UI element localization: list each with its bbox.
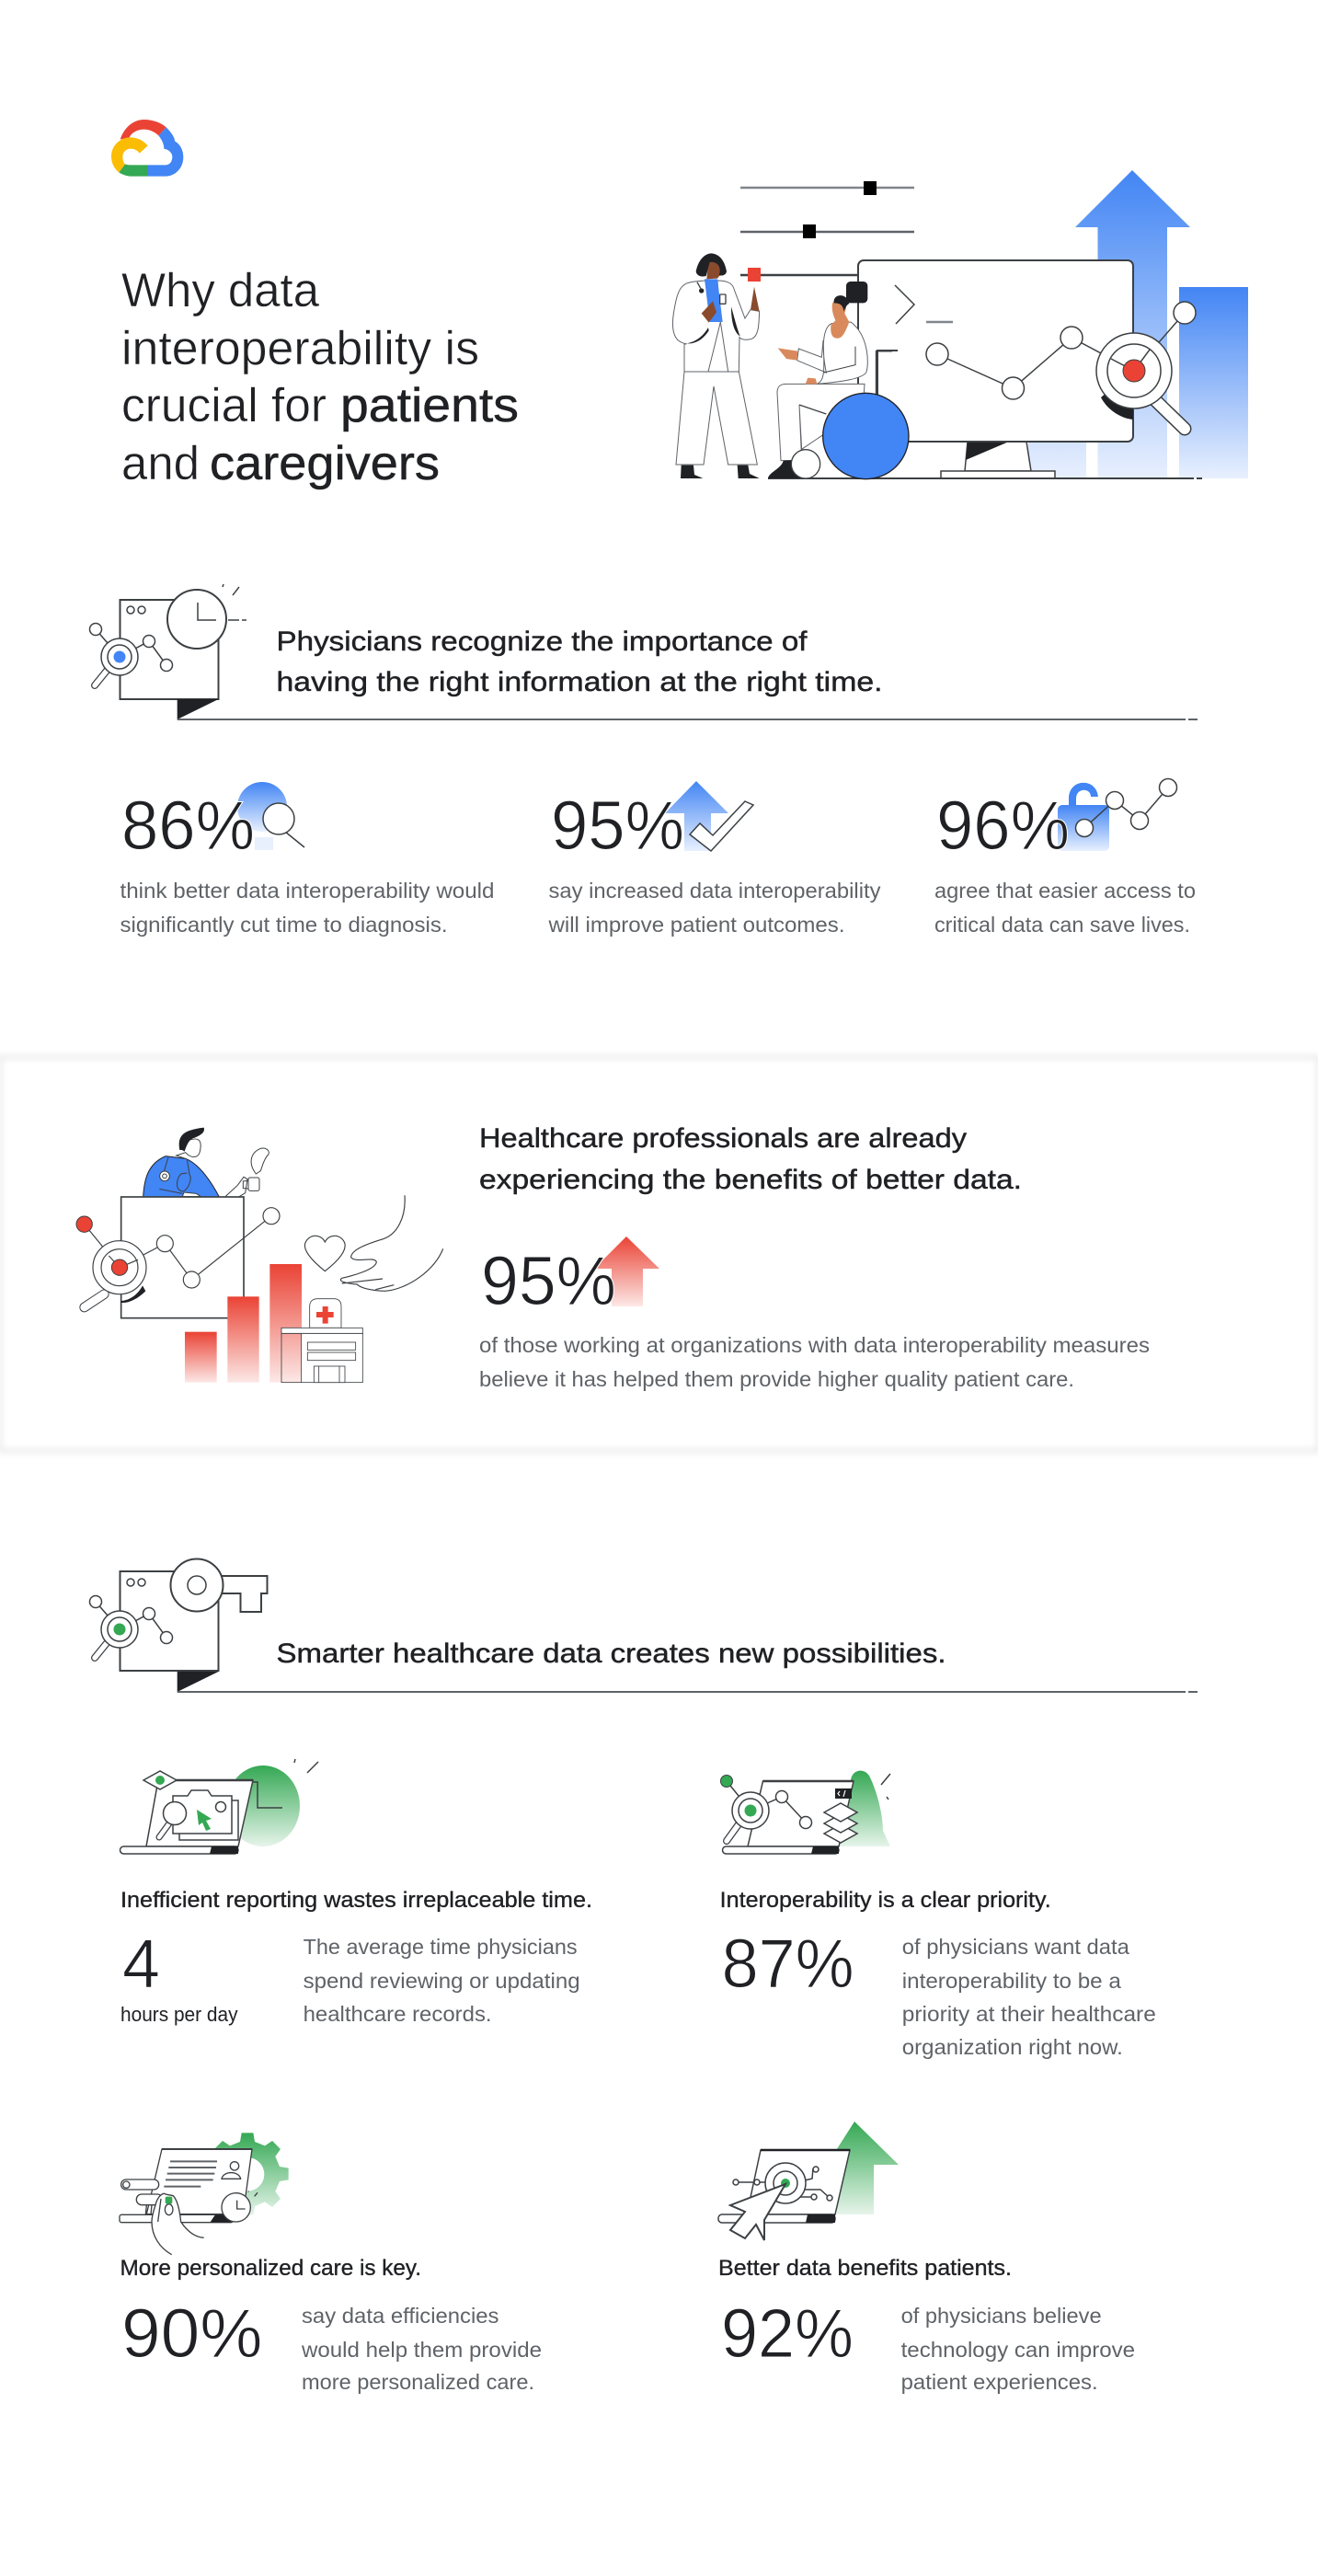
window and chart (76, 1197, 280, 1318)
block: patient benefits: Better data benefits patients. (718, 2256, 1012, 2281)
title: and (121, 437, 200, 490)
stat 86 percent (120, 782, 495, 937)
hero illustration (672, 170, 1248, 479)
line chart with magnifier (926, 302, 1196, 429)
icon: record with gear and hand (120, 2133, 289, 2255)
stat 86 percent: 86% (121, 787, 255, 864)
divider (178, 719, 1198, 720)
title: interoperability is (121, 322, 479, 375)
block: inefficient reporting: healthcare records. (304, 2002, 492, 2026)
stat 86 percent: significantly cut time to diagnosis. (120, 913, 448, 937)
title: crucial for (121, 379, 327, 432)
block: personalized care: say data efficiencies (302, 2304, 499, 2328)
stat 95 percent: say increased data interoperability (548, 879, 881, 903)
icon: person and magnifier (237, 782, 304, 850)
heading: smarter data: Smarter healthcare data creates new possibilities. (276, 1639, 946, 1669)
block: inefficient reporting: spend reviewing or updating (304, 1969, 580, 1993)
stat 96 percent: 96% (936, 787, 1070, 864)
logo: Google Cloud (111, 120, 183, 177)
block: inefficient reporting: 4 (122, 1925, 160, 2002)
heading: benefits (479, 1123, 1022, 1195)
block: personalized care (120, 2133, 542, 2394)
heading: physicians: having the right information at the right time. (276, 667, 883, 697)
stat 95 percent with red arrow: of those working at organizations with data interoperability measures (479, 1333, 1150, 1357)
title: caregivers (210, 437, 440, 490)
icon: laptop with records (120, 1759, 318, 1854)
stat 95 percent with red arrow (479, 1236, 1150, 1391)
sliders (740, 181, 914, 282)
heading: physicians: Physicians recognize the importance of (276, 627, 808, 657)
red bars (185, 1264, 302, 1383)
block: clear priority: Interoperability is a clear priority. (720, 1888, 1051, 1913)
hospital (281, 1299, 362, 1383)
clinician (143, 1128, 247, 1197)
title: Why data (121, 264, 319, 317)
block: patient benefits: 92% (721, 2294, 854, 2372)
icon: lock and chart (1058, 778, 1177, 851)
section icon: clock and data window (90, 584, 246, 719)
stat 95 percent with red arrow: believe it has helped them provide higher quality patient care. (479, 1367, 1074, 1391)
block: inefficient reporting: The average time physicians (304, 1935, 578, 1959)
block: personalized care: would help them provide (301, 2338, 542, 2362)
block: personalized care: 90% (121, 2294, 263, 2372)
stat 96 percent: critical data can save lives. (934, 913, 1190, 937)
block: inefficient reporting: Inefficient reporting wastes irreplaceable time. (120, 1888, 592, 1913)
stat 95 percent: 95% (551, 787, 684, 864)
block: patient benefits (718, 2122, 1135, 2394)
section icon: key and data window (90, 1558, 267, 1692)
stat 96 percent: agree that easier access to (934, 879, 1196, 903)
block: patient benefits: patient experiences. (901, 2370, 1098, 2394)
block: personalized care: more personalized care. (302, 2370, 534, 2394)
heading: physicians (276, 627, 883, 697)
block: patient benefits: technology can improve (901, 2338, 1135, 2362)
coffee cup (243, 1148, 269, 1190)
people (672, 253, 909, 479)
illustration: clinician, chart, bars, hospital (76, 1128, 443, 1383)
stat 96 percent (934, 778, 1196, 937)
wheelchair (791, 351, 909, 479)
heading: benefits: Healthcare professionals are already (479, 1123, 967, 1154)
block: inefficient reporting: hours per day (120, 2003, 237, 2026)
stat 95 percent: will improve patient outcomes. (547, 913, 844, 937)
patient (768, 282, 867, 478)
icon: laptop with code (721, 1771, 890, 1854)
stat 86 percent: think better data interoperability would (120, 879, 495, 903)
heading: benefits: experiencing the benefits of better data. (479, 1165, 1022, 1195)
block: clear priority: interoperability to be a (902, 1969, 1121, 1993)
icon: arrow and check (665, 781, 753, 851)
heart (304, 1236, 345, 1271)
block: personalized care: More personalized care is key. (120, 2256, 421, 2281)
title (121, 264, 519, 490)
block: clear priority: 87% (722, 1925, 854, 2002)
block: patient benefits: of physicians believe (901, 2304, 1102, 2328)
stat 95 percent with red arrow: 95% (481, 1242, 616, 1319)
divider (178, 1691, 1198, 1693)
block: inefficient reporting (120, 1759, 592, 2026)
block: clear priority: organization right now. (902, 2035, 1123, 2059)
block: clear priority: of physicians want data (902, 1935, 1129, 1959)
doctor (672, 253, 760, 478)
title: patients (340, 379, 519, 432)
panel: healthcare professionals (0, 1057, 1318, 1451)
block: clear priority (720, 1771, 1156, 2059)
stat 95 percent (547, 781, 881, 937)
caring hand (340, 1195, 443, 1291)
block: clear priority: priority at their healthcare (902, 2002, 1156, 2026)
monitor (768, 260, 1202, 478)
icon: laptop with target and cursor (718, 2122, 899, 2240)
growth arrow and bars (1028, 170, 1248, 478)
